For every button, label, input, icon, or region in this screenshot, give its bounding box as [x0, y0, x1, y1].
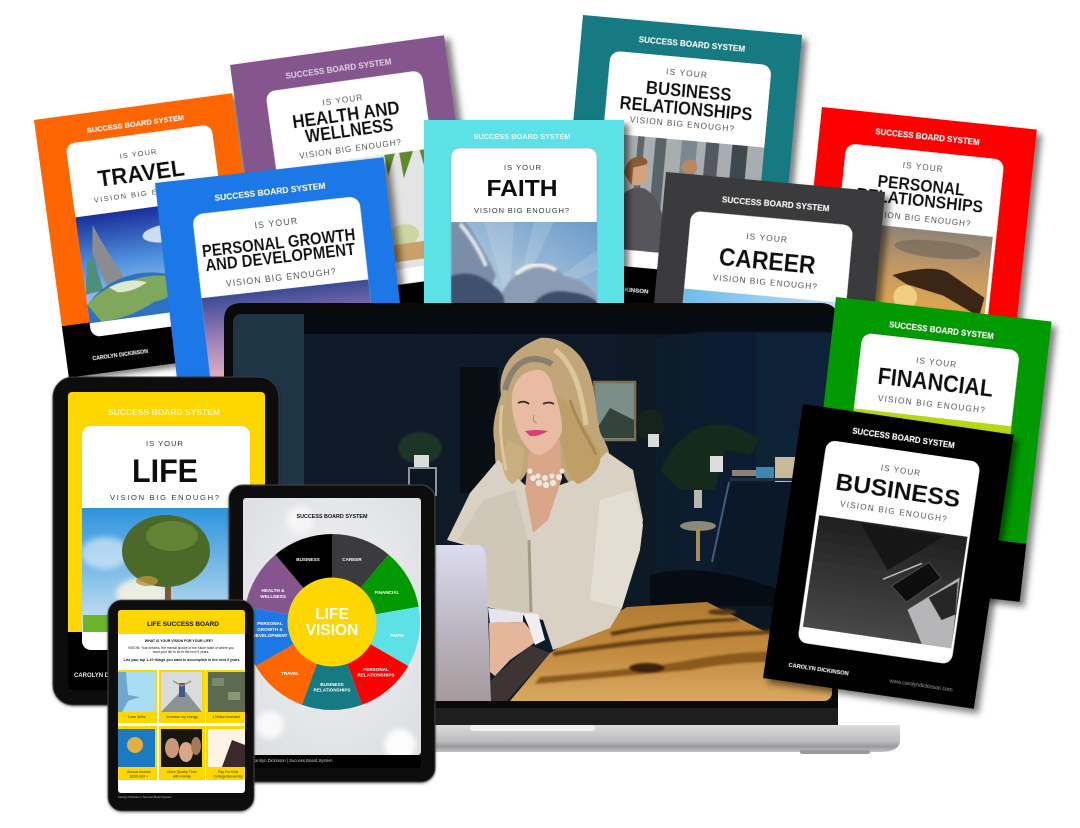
- tablet: life cover: IS YOUR: [146, 439, 184, 448]
- book: career: VISION BIG ENOUGH?: [712, 272, 818, 292]
- wheel segment labels: PERSONAL: [363, 667, 389, 672]
- book: personal relationships: PERSONAL: [877, 171, 966, 200]
- hand and watch: [488, 608, 545, 676]
- book: business relationships: RELATIONSHIPS: [619, 92, 753, 125]
- board title: LIFE SUCCESS BOARD: [147, 621, 219, 628]
- heading: SUCCESS BOARD SYSTEM: [722, 195, 830, 214]
- grid of goals: $200,000 +: [130, 774, 148, 778]
- heading: SUCCESS BOARD SYSTEM: [214, 181, 326, 203]
- wheel segment labels: BUSINESS: [320, 682, 344, 687]
- hair side waves: [502, 395, 601, 484]
- book: personal growth and development: AND DEVELOPMENT: [204, 239, 357, 276]
- book: faith: IS YOUR: [504, 163, 542, 172]
- tablet: life cover: LIFE: [132, 453, 198, 489]
- heading: SUCCESS BOARD SYSTEM: [86, 113, 185, 135]
- book: financial: [804, 297, 1052, 602]
- footer: Carolyn Dickinson | Success Board System: [252, 758, 333, 763]
- travel image: [75, 206, 170, 324]
- grid of goals: Annual Income: [127, 770, 151, 774]
- laptop: [224, 303, 900, 754]
- table: [510, 602, 832, 701]
- desk image: [803, 515, 968, 648]
- wheel segment labels: CAREER: [342, 557, 362, 562]
- pearl necklace: [527, 468, 565, 488]
- instructions: want your life to be in the next 5 years.: [153, 650, 209, 654]
- face: [512, 370, 562, 455]
- grid of goals: [116, 670, 248, 780]
- heading: SUCCESS BOARD SYSTEM: [852, 426, 956, 450]
- card: [82, 426, 250, 650]
- book: personal growth and development: PERSONAL GROWTH: [201, 224, 356, 261]
- book: financial: FINANCIAL: [876, 363, 995, 403]
- tablet: life cover: [53, 377, 279, 705]
- sunset image: [201, 279, 382, 418]
- book: faith: VISION BIG ENOUGH?: [474, 206, 570, 215]
- door: [460, 367, 498, 493]
- book: faith: FAITH: [486, 175, 558, 201]
- wheel segment labels: TRAVEL: [281, 671, 299, 676]
- tablet: life cover: VISION BIG ENOUGH?: [110, 493, 220, 502]
- life vision wheel: [244, 534, 420, 710]
- heading: SUCCESS BOARD SYSTEM: [889, 320, 994, 341]
- chair and stool: [650, 482, 795, 606]
- sky image: [451, 222, 597, 306]
- life vision wheel: VISION: [306, 622, 358, 639]
- book: health and wellness: IS YOUR: [322, 93, 364, 108]
- wheel segment labels: PERSONAL: [257, 621, 283, 626]
- back wall: [684, 331, 832, 572]
- grid of goals: Lose 30lbs: [128, 715, 146, 719]
- book: health and wellness: [230, 35, 466, 303]
- wheel segment labels: RELATIONSHIPS: [358, 672, 394, 678]
- tree image: [82, 508, 228, 632]
- author: CAROLYN DICKINSON: [582, 284, 649, 296]
- heading: SUCCESS BOARD SYSTEM: [285, 57, 392, 81]
- book: travel: IS YOUR: [119, 147, 158, 161]
- website: www.carolyndickinson.com: [889, 678, 953, 694]
- heading: SUCCESS BOARD SYSTEM: [474, 132, 570, 141]
- wheel segment labels: BUSINESS: [296, 557, 320, 562]
- heading: SUCCESS BOARD SYSTEM: [108, 407, 220, 417]
- book: business relationships: IS YOUR: [666, 66, 708, 80]
- book: business relationships: BUSINESS: [645, 77, 732, 105]
- grid of goals: 1 Million invested: [212, 715, 240, 719]
- framed picture: [594, 382, 635, 440]
- grid of goals: with Family: [173, 774, 191, 778]
- wheel segment labels: WELLNESS: [260, 594, 286, 599]
- book: personal growth and development: VISION BIG ENOUGH?: [225, 266, 337, 289]
- instructions: VISION: Your dreams, the mental picture of the future state of where you: [128, 646, 234, 650]
- photo: woman at laptop: [233, 314, 832, 701]
- silver base: [380, 725, 900, 752]
- right plant: [636, 409, 760, 508]
- book: travel: VISION BIG ENOUGH?: [93, 182, 198, 205]
- book: career: IS YOUR: [746, 231, 788, 245]
- instructions: WHAT IS YOUR VISION FOR YOUR LIFE?: [145, 639, 213, 643]
- wheel segment labels: FINANCIAL: [375, 590, 400, 595]
- wellness image: [294, 149, 424, 270]
- phone footer: Carolyn Dickinson | Success Board System: [118, 795, 172, 799]
- wheel segment labels: GROWTH &: [257, 627, 283, 632]
- book: health and wellness: WELLNESS: [304, 114, 394, 147]
- wheel centre label: LIFE: [315, 606, 349, 623]
- sunset hand image: [875, 225, 993, 314]
- phone: life success board: [108, 600, 254, 811]
- book: personal relationships: RELATIONSHIPS: [855, 184, 984, 217]
- book: business: BUSINESS: [834, 469, 962, 513]
- book: health and wellness: HEALTH AND: [291, 96, 401, 132]
- grid of goals: Pay For Kids: [218, 770, 238, 774]
- book: business: IS YOUR: [880, 463, 922, 478]
- book: personal relationships: IS YOUR: [902, 161, 944, 174]
- heading: SUCCESS BOARD SYSTEM: [875, 127, 980, 147]
- book: career: CAREER: [718, 243, 817, 280]
- wheel segment labels: DEVELOPMENT: [253, 633, 288, 638]
- image strip: [847, 408, 1011, 491]
- left plant: [398, 432, 442, 495]
- book: travel: [34, 93, 245, 377]
- sky image: [681, 289, 846, 335]
- book: business: [763, 404, 1014, 709]
- wheel segment labels: [253, 557, 404, 692]
- instructions: List your top 1-10 things you want to accomplish in the next 3 years.: [124, 658, 240, 662]
- book: financial: IS YOUR: [916, 356, 958, 370]
- book: travel: TRAVEL: [96, 154, 186, 192]
- tablet: wheel: [229, 485, 435, 782]
- office image: [624, 134, 764, 253]
- book: personal growth and development: IS YOUR: [254, 216, 299, 230]
- book: financial: VISION BIG ENOUGH?: [877, 394, 986, 415]
- heading: SUCCESS BOARD SYSTEM: [296, 514, 368, 520]
- wheel segment labels: HEALTH &: [262, 588, 285, 593]
- books on shelf: [730, 457, 795, 482]
- chest and neck: [525, 440, 562, 533]
- book: business: VISION BIG ENOUGH?: [839, 499, 948, 524]
- book: personal relationships: VISION BIG ENOUGH?: [868, 209, 972, 229]
- hair strands: [501, 350, 596, 470]
- laptop in photo: [435, 545, 491, 701]
- bezel: [224, 303, 838, 725]
- grid of goals: Increase my energy: [166, 715, 198, 719]
- book: business relationships: VISION BIG ENOUGH?: [629, 114, 735, 134]
- book: health and wellness: VISION BIG ENOUGH?: [299, 138, 403, 161]
- book: business relationships: [557, 15, 802, 320]
- grid of goals: College/University: [214, 774, 243, 778]
- wrist pad: [491, 645, 550, 701]
- wheel segment labels: FAITH: [390, 633, 404, 638]
- instructions: [124, 639, 240, 662]
- book: faith: [424, 120, 624, 308]
- heading: SUCCESS BOARD SYSTEM: [638, 35, 746, 54]
- author: CAROLYN DICKINSON: [74, 673, 138, 679]
- author: CAROLYN DICKINSON: [92, 349, 149, 362]
- book: personal growth and development: [155, 157, 417, 480]
- wheel segment labels: RELATIONSHIPS: [314, 688, 350, 692]
- blouse: [447, 452, 643, 650]
- book: personal relationships: [814, 107, 1046, 318]
- grid of goals: More Quality Time: [167, 770, 197, 774]
- author: CAROLYN DICKINSON: [788, 663, 849, 677]
- hair back: [493, 338, 609, 486]
- book: career: [653, 172, 885, 338]
